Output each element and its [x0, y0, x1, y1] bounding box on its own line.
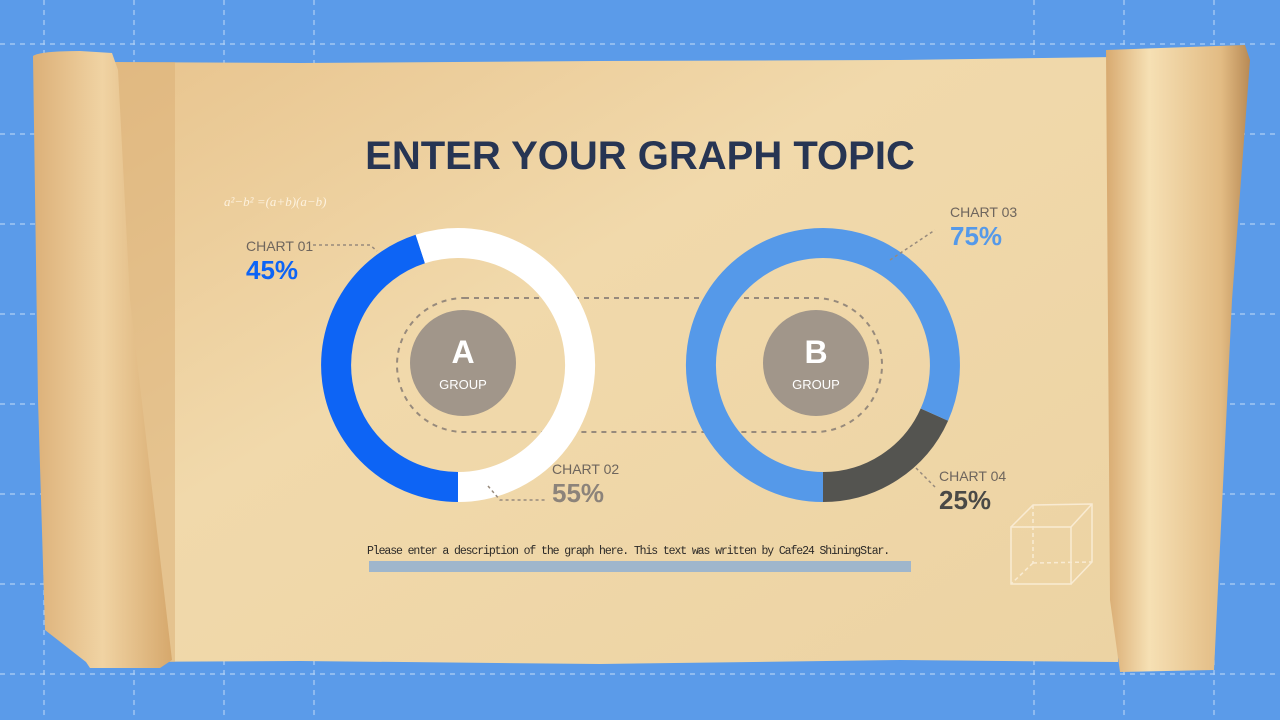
center A: GROUP: [439, 377, 487, 392]
label chart 02: 55%: [552, 478, 604, 508]
center B: B: [804, 334, 828, 370]
label chart 02: [552, 461, 619, 508]
description text: Please enter a description of the graph here. This text was written by Cafe24 ShiningStar.: [367, 545, 889, 558]
formula doodle: a²−b² =(a+b)(a−b): [224, 194, 326, 209]
label chart 01: [246, 238, 313, 285]
label chart 03: CHART 03: [950, 204, 1017, 220]
center B: [763, 310, 869, 416]
center A: A: [451, 334, 475, 370]
label chart 04: CHART 04: [939, 468, 1006, 484]
donut B: [701, 243, 945, 487]
label chart 01: 45%: [246, 255, 298, 285]
label chart 04: 25%: [939, 485, 991, 515]
center A: [410, 310, 516, 416]
donut A: [336, 243, 580, 487]
label chart 02: CHART 02: [552, 461, 619, 477]
label chart 03: 75%: [950, 221, 1002, 251]
description highlight bar: [369, 561, 911, 572]
label chart 04: [939, 468, 1006, 515]
title: ENTER YOUR GRAPH TOPIC: [365, 134, 915, 178]
label chart 01: CHART 01: [246, 238, 313, 254]
right roll: [1106, 45, 1250, 672]
left roll: [33, 51, 172, 668]
connector dashed ring: [397, 298, 882, 432]
label chart 03: [950, 204, 1017, 251]
center B: GROUP: [792, 377, 840, 392]
scroll paper: [112, 57, 1118, 664]
cube doodle: [1011, 504, 1092, 584]
